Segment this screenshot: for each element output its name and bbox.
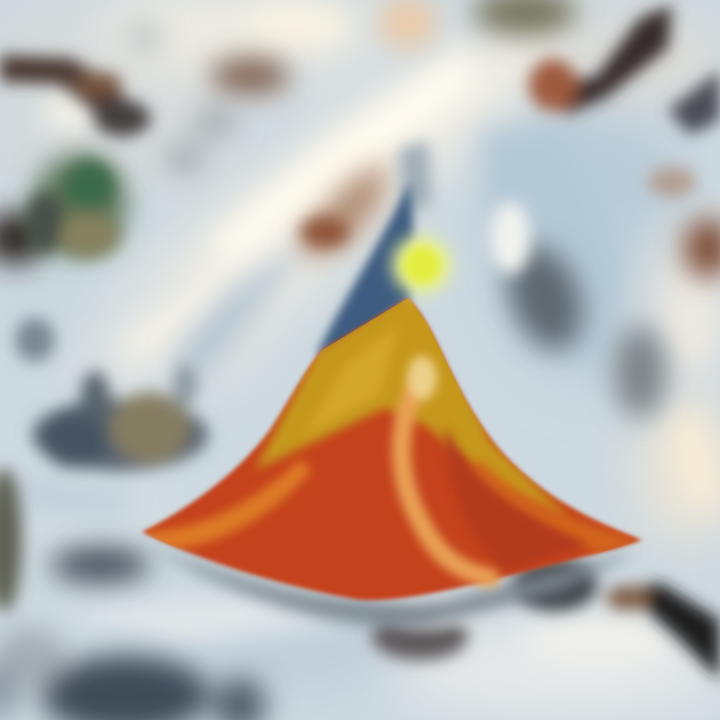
rock: small stone at left	[15, 318, 55, 362]
rocks: top edge tan patches	[380, 0, 577, 48]
snow: white patch above right stone	[490, 202, 530, 274]
tent: orange left edge band	[145, 460, 312, 550]
tent top: mast glow	[398, 140, 432, 215]
rocks: brown patch core	[301, 217, 349, 247]
tent: dark red right panel	[445, 425, 590, 572]
rocks: top right dark ridge	[529, 5, 720, 197]
tent: glowing yellow-green ball	[392, 235, 452, 295]
tent shadow	[150, 545, 640, 628]
tent: lighter yellow facet	[314, 334, 393, 426]
tent: blue upper panel	[316, 182, 414, 356]
tent: yellow upper panel	[255, 290, 570, 520]
bush: green shrub on left	[0, 155, 126, 264]
rocks: brown patch beside tent peak	[300, 160, 390, 260]
tent: orange right fringe	[465, 460, 640, 555]
rocks: bottom right dark ridge	[372, 559, 720, 680]
tent body	[142, 290, 642, 600]
rocks: top centre brown patch	[127, 20, 290, 172]
bush: shrub detail	[27, 161, 120, 257]
rocks: left edge stone	[0, 468, 22, 612]
snow: blue shadow strokes	[0, 130, 620, 520]
tent: pale highlight	[407, 356, 437, 400]
rocks: right side stones	[495, 218, 720, 418]
tent: pale centre seam	[401, 390, 490, 578]
tent: panels clipped to body	[145, 290, 640, 572]
rocks: large boulder group	[32, 363, 208, 471]
rocks: top left dark outcrop	[0, 55, 152, 138]
rocks: lower left dark stones	[0, 547, 266, 720]
tent: red base	[142, 298, 642, 600]
